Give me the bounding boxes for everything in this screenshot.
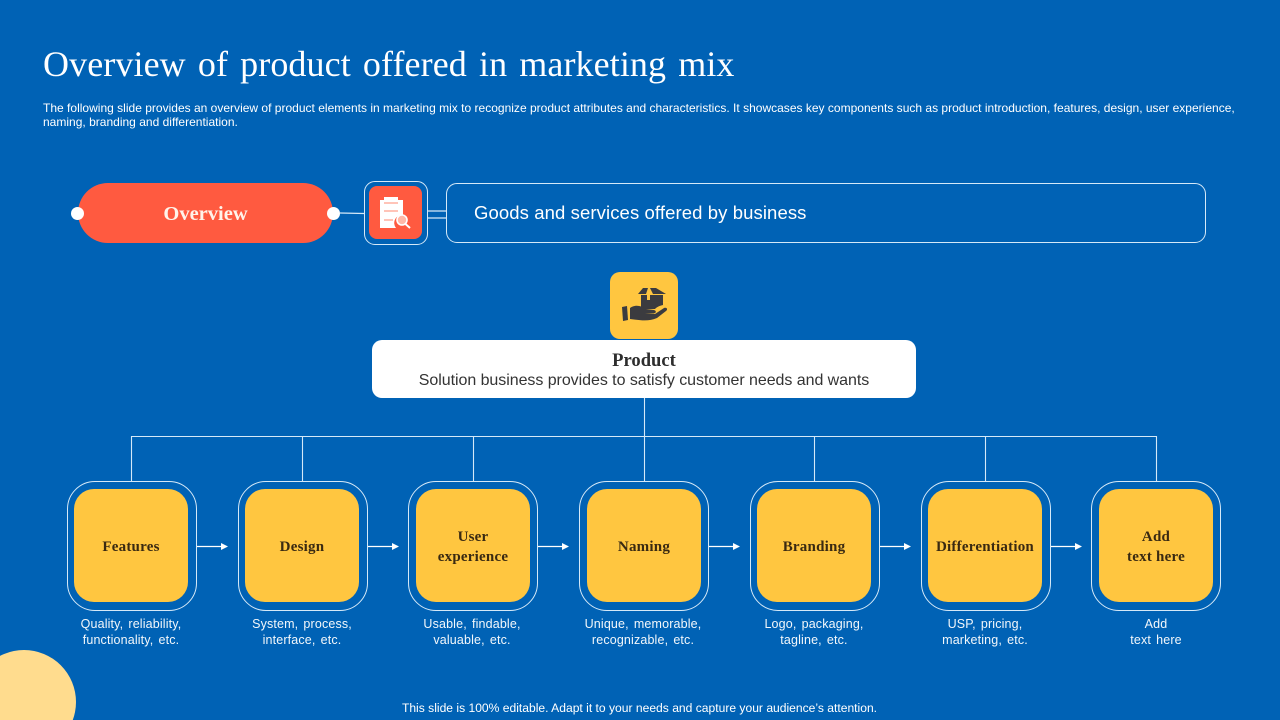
icon: hand holding box bbox=[610, 272, 678, 339]
add text card bbox=[1099, 489, 1213, 602]
branding card bbox=[757, 489, 871, 602]
differentiation caption: USP, pricing, bbox=[948, 617, 1022, 631]
overview pill: Overview bbox=[163, 203, 248, 225]
user experience caption: valuable, etc. bbox=[433, 633, 511, 647]
step: branding bbox=[750, 481, 880, 611]
step: design bbox=[238, 481, 368, 611]
user experience caption bbox=[423, 617, 521, 647]
footer note: This slide is 100% editable. Adapt it to your needs and capture your audience’s attention. bbox=[402, 701, 877, 715]
differentiation card: Differentiation bbox=[936, 539, 1034, 555]
add text caption bbox=[1130, 617, 1182, 647]
user experience card bbox=[416, 489, 530, 602]
decorative corner circle bbox=[0, 650, 76, 720]
design caption bbox=[252, 617, 352, 647]
add text caption: Add bbox=[1145, 617, 1167, 631]
pill left dot bbox=[71, 207, 84, 220]
overview description box: Goods and services offered by business bbox=[474, 202, 807, 223]
differentiation card bbox=[928, 489, 1042, 602]
user experience card: experience bbox=[438, 549, 508, 565]
features caption bbox=[81, 617, 181, 647]
branding card: Branding bbox=[783, 539, 845, 555]
user experience card: User bbox=[458, 529, 488, 545]
branding caption: Logo, packaging, bbox=[764, 617, 864, 631]
step: naming bbox=[579, 481, 709, 611]
product box bbox=[372, 340, 916, 398]
user experience caption: Usable, findable, bbox=[423, 617, 521, 631]
design card: Design bbox=[280, 539, 324, 555]
features caption: Quality, reliability, bbox=[81, 617, 181, 631]
naming card: Naming bbox=[618, 539, 670, 555]
naming caption: Unique, memorable, bbox=[585, 617, 701, 631]
overview icon frame bbox=[364, 181, 428, 245]
design caption: System, process, bbox=[252, 617, 352, 631]
overview description box bbox=[446, 183, 1206, 243]
step: add text bbox=[1091, 481, 1221, 611]
branding caption bbox=[764, 617, 864, 647]
subtitle description: naming, branding and differentiation. bbox=[43, 114, 238, 128]
design caption: interface, etc. bbox=[263, 633, 341, 647]
add text card: Add bbox=[1142, 529, 1170, 545]
differentiation caption: marketing, etc. bbox=[942, 633, 1028, 647]
step: user experience bbox=[408, 481, 538, 611]
product description: Solution business provides to satisfy customer needs and wants bbox=[419, 372, 869, 388]
title: Overview of product offered in marketing mix bbox=[43, 44, 735, 84]
overview pill bbox=[78, 183, 333, 243]
features caption: functionality, etc. bbox=[83, 633, 179, 647]
add text card: text here bbox=[1127, 549, 1185, 565]
features card bbox=[74, 489, 188, 602]
product heading: Product bbox=[612, 350, 676, 370]
naming caption: recognizable, etc. bbox=[592, 633, 694, 647]
subtitle description: The following slide provides an overview of product elements in marketing mix to recognize product attributes and characteristics. It showcases key components such as product introduction, features, design, user experience, bbox=[43, 100, 1235, 114]
step: differentiation bbox=[921, 481, 1051, 611]
features card: Features bbox=[102, 539, 160, 555]
pill right dot bbox=[327, 207, 340, 220]
naming card bbox=[587, 489, 701, 602]
icon: clipboard with magnifier bbox=[369, 186, 422, 239]
subtitle description bbox=[43, 100, 1235, 128]
add text caption: text here bbox=[1130, 633, 1182, 647]
naming caption bbox=[585, 617, 701, 647]
branding caption: tagline, etc. bbox=[780, 633, 848, 647]
design card bbox=[245, 489, 359, 602]
differentiation caption bbox=[942, 617, 1028, 647]
step: features bbox=[67, 481, 197, 611]
